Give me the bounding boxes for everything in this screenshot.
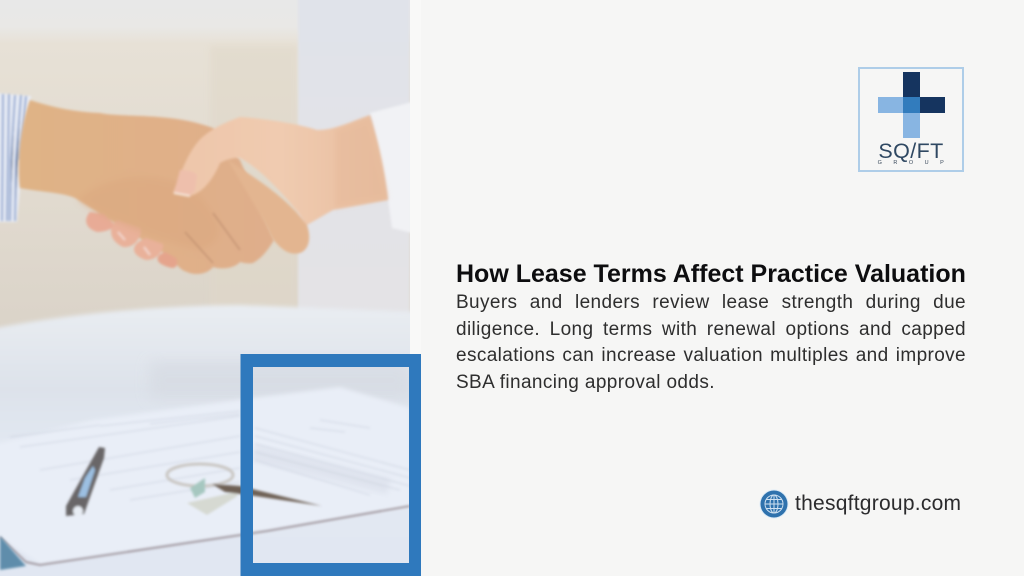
logo subtitle: GROUP bbox=[878, 160, 955, 166]
icon: globe bbox=[760, 490, 788, 518]
body paragraph bbox=[456, 292, 966, 393]
finger creases bbox=[185, 213, 240, 263]
left hand bbox=[19, 100, 274, 274]
body paragraph: SBA financing approval odds. bbox=[456, 372, 715, 393]
lease document papers bbox=[0, 387, 410, 570]
heading: How Lease Terms Affect Practice Valuation bbox=[456, 260, 966, 288]
white edge of photo bbox=[410, 0, 421, 354]
background wall bbox=[0, 0, 410, 335]
logo cross bbox=[878, 72, 945, 138]
ring finger bbox=[111, 220, 141, 247]
pinky finger bbox=[86, 212, 116, 232]
knuckle shading bbox=[78, 177, 219, 250]
white coat cuff bbox=[370, 102, 412, 233]
thumb nail bbox=[174, 170, 197, 196]
photo: handshake over lease documents bbox=[0, 0, 421, 576]
body paragraph: diligence. Long terms with renewal options and capped bbox=[456, 319, 966, 340]
right hand fingers bbox=[228, 160, 309, 254]
nail highlights bbox=[118, 232, 150, 255]
table surface bbox=[0, 305, 420, 576]
index finger tip bbox=[157, 252, 177, 268]
pen bbox=[66, 447, 105, 516]
blue square frame bbox=[240, 354, 421, 576]
right hand bbox=[173, 115, 388, 254]
logo: SQ/FT Group bbox=[858, 67, 964, 172]
website url: thesqftgroup.com bbox=[795, 492, 961, 515]
wrist shading bbox=[335, 118, 388, 208]
body paragraph: escalations can increase valuation multiples and improve bbox=[456, 345, 966, 366]
logo wordmark: SQ/FT bbox=[878, 139, 944, 163]
middle finger bbox=[134, 238, 163, 260]
handshake bbox=[0, 93, 412, 274]
shirt cuff: striped bbox=[0, 93, 31, 222]
keys bbox=[167, 464, 322, 515]
body paragraph: Buyers and lenders review lease strength during due bbox=[456, 292, 966, 313]
